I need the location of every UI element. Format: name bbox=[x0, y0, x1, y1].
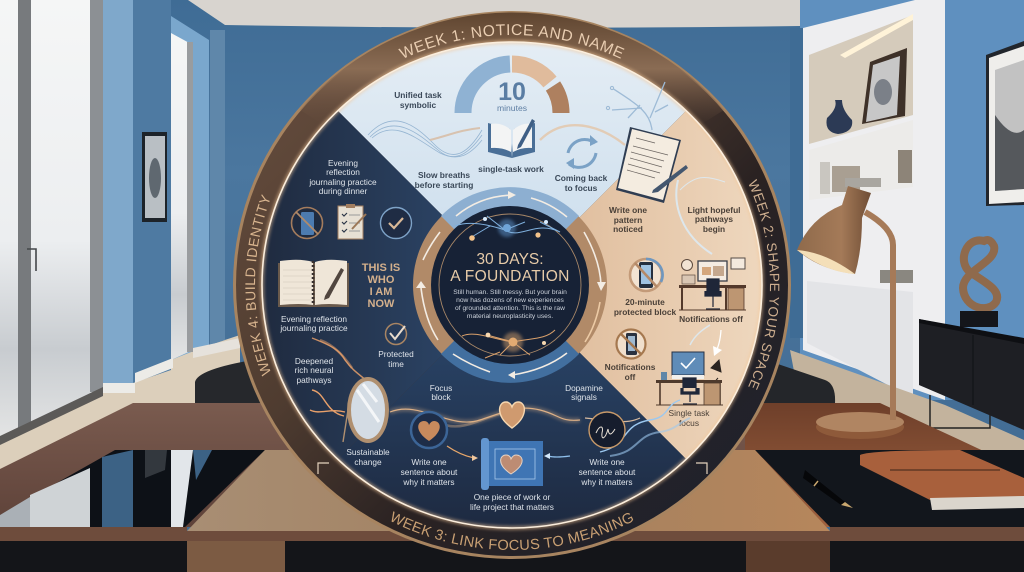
right wall picture bbox=[986, 41, 1024, 206]
icon: branching tree bbox=[606, 82, 668, 130]
title: 30 days a foundation: 30 DAYS: bbox=[476, 251, 544, 268]
icon: clock with check bbox=[380, 208, 412, 238]
label: coming back to focus: Coming back bbox=[555, 173, 608, 183]
label: light hopeful pathways: pathways bbox=[695, 214, 733, 224]
framed picture on left wall bbox=[142, 132, 167, 222]
icon: arrow bbox=[713, 330, 722, 356]
icon: signature circle bbox=[589, 412, 625, 448]
panel: week 2 bbox=[580, 112, 762, 458]
label: evening reflection during dinner: during dinner bbox=[319, 186, 367, 196]
outer bronze ring bbox=[233, 11, 791, 559]
centre hub bbox=[413, 187, 607, 383]
icon: single task desk bbox=[656, 352, 723, 405]
label: notifications off: Notifications bbox=[605, 362, 656, 372]
label: this is who i am now: THIS IS bbox=[362, 262, 400, 274]
books on shelf bbox=[820, 162, 830, 194]
label: deepened rich neural pathways: rich neural bbox=[295, 365, 334, 375]
icon: desk with monitor bbox=[679, 258, 746, 310]
quadrants bbox=[262, 42, 762, 527]
heading: week 2: WEEK 2: SHAPE YOUR SPACE bbox=[748, 179, 780, 390]
glowing neural paths bbox=[310, 338, 372, 416]
right glass inset bbox=[755, 450, 1024, 527]
label: 20-minute protected block: protected block bbox=[614, 307, 677, 317]
floor left bbox=[0, 335, 240, 520]
label: protected time: time bbox=[388, 359, 404, 369]
icon: check circle bbox=[386, 324, 406, 344]
sofas bbox=[195, 358, 265, 403]
label: sustainable change: change bbox=[354, 457, 382, 467]
circular wheel bbox=[233, 11, 791, 559]
label: this is who i am now: WHO bbox=[368, 274, 395, 286]
neuron node left bbox=[469, 235, 475, 241]
ring arrows bbox=[416, 191, 606, 379]
ring segments bbox=[413, 187, 607, 383]
title: 30 days a foundation: A FOUNDATION bbox=[450, 268, 570, 285]
label: single-task work: single-task work bbox=[478, 164, 544, 174]
icon: clipboard checklist bbox=[338, 204, 366, 239]
lower cabinets bbox=[807, 281, 913, 398]
desk wood top bbox=[0, 403, 760, 527]
label: unified task symbolic: Unified task bbox=[394, 90, 442, 100]
label: deepened rich neural pathways: Deepened bbox=[295, 356, 334, 366]
label: coming back to focus: to focus bbox=[565, 183, 598, 193]
neurons: orange bbox=[462, 330, 555, 358]
icon: open book and pen bbox=[488, 119, 535, 158]
baseboards bbox=[103, 358, 173, 393]
label: slow breaths: Slow breaths bbox=[418, 170, 470, 180]
icon: circular arrows bbox=[566, 135, 598, 169]
icon: blueprint with heart bbox=[481, 438, 543, 490]
week 2 contents bbox=[605, 127, 746, 428]
arrows to blueprint bbox=[447, 446, 570, 461]
label: evening reflection during dinner: Evening bbox=[328, 158, 358, 168]
label: evening reflection journaling practice: Evening reflection bbox=[281, 314, 347, 324]
icon: no phone with ring bbox=[630, 259, 663, 291]
light ribbons bbox=[390, 408, 640, 426]
desk lamp bbox=[797, 186, 904, 439]
label: write one pattern noticed: noticed bbox=[613, 224, 643, 234]
label: light hopeful pathways: Light hopeful bbox=[687, 205, 741, 215]
right wall and shelving bbox=[800, 0, 1024, 400]
label: unified task symbolic: symbolic bbox=[400, 100, 436, 110]
label: write one pattern noticed: pattern bbox=[614, 215, 642, 225]
label: one piece of work: One piece of work or bbox=[474, 492, 551, 502]
panel: week 3 bbox=[338, 352, 686, 527]
glowing pathway bbox=[676, 177, 725, 345]
gauge: 10 minutes bbox=[463, 64, 561, 113]
icon: open journal bbox=[278, 260, 349, 307]
desk edge bbox=[0, 527, 1024, 541]
body text: material neuroplasticity uses. bbox=[467, 313, 553, 320]
body text: of grounded attention. This is the raw bbox=[455, 305, 565, 312]
label: protected time: Protected bbox=[378, 349, 414, 359]
corner bracket left bbox=[318, 463, 329, 474]
wave: warm ribbon bbox=[540, 125, 625, 145]
label: one piece of work: life project that matters bbox=[470, 502, 554, 512]
label: single task focus: focus bbox=[679, 418, 699, 428]
body text: now has dozens of new experiences bbox=[456, 297, 565, 304]
label: single task focus: Single task bbox=[669, 408, 710, 418]
black console cabinet bbox=[919, 319, 1024, 430]
label: notifications off: Notifications off bbox=[679, 314, 743, 324]
ceiling bbox=[188, 0, 830, 28]
label: write one sentence right: sentence about bbox=[579, 467, 636, 477]
neuron node right bbox=[535, 232, 541, 238]
label: write one sentence left: Write one bbox=[411, 457, 447, 467]
icon: glowing heart bbox=[500, 402, 524, 428]
panel: week 1 bbox=[338, 42, 686, 218]
icon: no phone bbox=[616, 330, 646, 358]
label: notifications off: off bbox=[625, 372, 636, 382]
label: write one sentence left: why it matters bbox=[402, 477, 455, 487]
floor right bbox=[745, 350, 1024, 480]
label: light hopeful pathways: begin bbox=[703, 224, 725, 234]
label: write one sentence right: Write one bbox=[589, 457, 625, 467]
label: dopamine signals: Dopamine bbox=[565, 383, 603, 393]
label: dopamine signals: signals bbox=[571, 392, 597, 402]
label: sustainable change: Sustainable bbox=[346, 447, 390, 457]
week 3 contents bbox=[318, 383, 707, 512]
leather notebook bbox=[860, 450, 1024, 510]
body text: Still human. Still messy. But your brain bbox=[453, 289, 567, 296]
label: write one pattern noticed: Write one bbox=[609, 205, 647, 215]
icon: mirror bbox=[343, 377, 389, 443]
label: write one sentence left: sentence about bbox=[401, 467, 458, 477]
label: this is who i am now: NOW bbox=[368, 298, 395, 310]
left glass inset bbox=[0, 450, 265, 527]
label: focus block: block bbox=[431, 392, 452, 402]
gauge: 10 minutes: 10 bbox=[498, 78, 526, 106]
label: focus block: Focus bbox=[430, 383, 452, 393]
icon: no phone bbox=[292, 208, 322, 238]
pen bbox=[803, 470, 853, 508]
label: deepened rich neural pathways: pathways bbox=[296, 375, 332, 385]
week 4 contents bbox=[278, 158, 414, 467]
left floor-to-ceiling window bbox=[0, 0, 103, 445]
icon: journal note bbox=[616, 127, 688, 203]
label: evening reflection journaling practice: journaling practice bbox=[279, 323, 348, 333]
inner orbit bbox=[439, 214, 581, 356]
heading: week 4: WEEK 4: BUILD IDENTITY bbox=[245, 194, 270, 376]
panel: week 4 bbox=[262, 112, 442, 458]
week 1 contents bbox=[368, 64, 668, 193]
glowing inner ring bbox=[262, 42, 762, 528]
corner bracket right bbox=[696, 463, 707, 474]
label: 20-minute protected block: 20-minute bbox=[625, 297, 665, 307]
dark core bbox=[431, 206, 589, 364]
side wall panels bbox=[103, 0, 133, 383]
label: write one sentence right: why it matters bbox=[580, 477, 633, 487]
label: this is who i am now: I AM bbox=[370, 286, 392, 298]
heading: week 1: WEEK 1: NOTICE AND NAME bbox=[398, 24, 624, 59]
label: evening reflection during dinner: journaling practice bbox=[308, 177, 377, 187]
gauge: 10 minutes: minutes bbox=[497, 103, 527, 113]
neurons: blue bbox=[455, 216, 560, 238]
waves: slow breaths bbox=[368, 121, 482, 157]
label: evening reflection during dinner: reflection bbox=[326, 167, 360, 177]
label: slow breaths: before starting bbox=[415, 180, 473, 190]
vase bbox=[826, 100, 852, 134]
sculpture bbox=[960, 240, 998, 327]
bronze desk front bbox=[187, 450, 830, 531]
icon: heart in circle bbox=[411, 412, 447, 448]
heading: week 3: WEEK 3: LINK FOCUS TO MEANING bbox=[392, 511, 634, 550]
